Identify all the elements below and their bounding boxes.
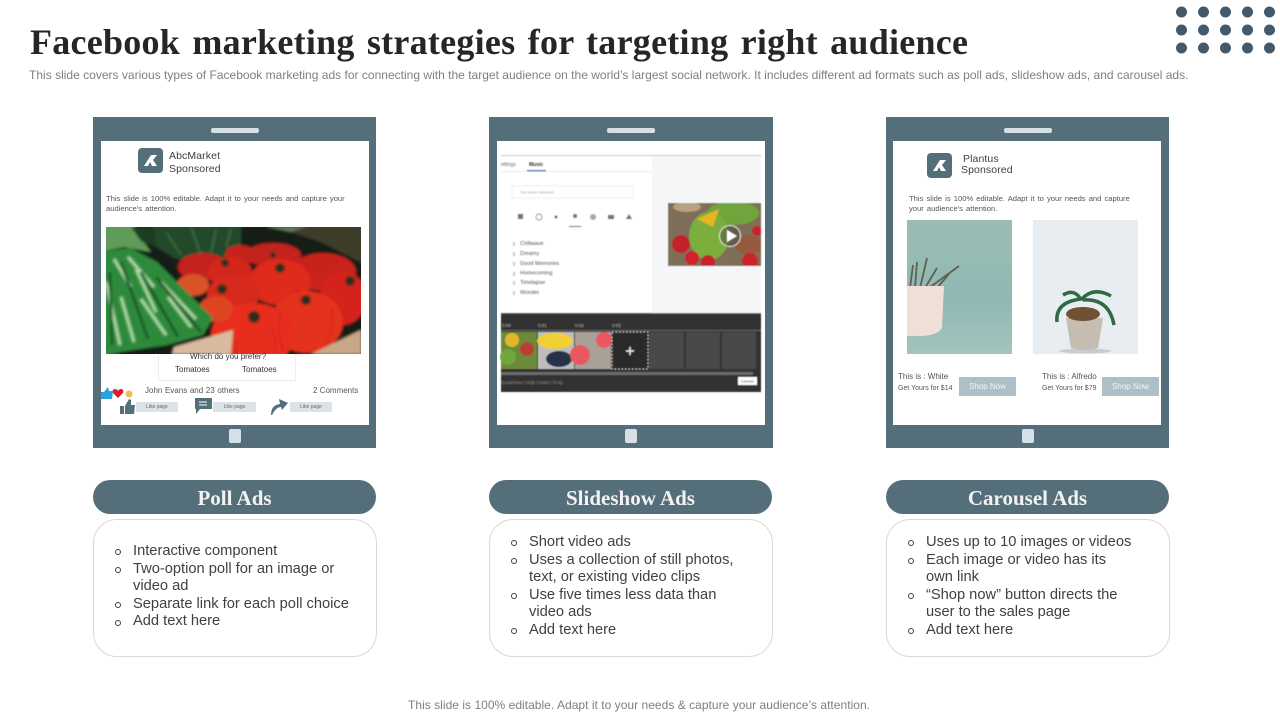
screenshot: slideshow video editor: Chillwave — [520, 241, 544, 247]
comment count: 2 Comments — [313, 386, 358, 395]
screenshot: slideshow video editor: Guidelines | Help Center | FAQ — [501, 380, 563, 385]
icon: brand logo — [927, 153, 952, 178]
icon: reactions — [101, 387, 132, 399]
bullet list — [908, 534, 1131, 638]
screenshot: slideshow video editor: Homecoming — [520, 270, 552, 276]
decorative dot grid — [1176, 6, 1275, 54]
preview image — [668, 201, 763, 269]
heading: carousel ads: Carousel Ads — [968, 486, 1087, 510]
panel: poll ads tablet mockup — [93, 117, 376, 448]
poll option one: Tomatoes — [175, 365, 210, 374]
product one price: Get Yours for $14 — [898, 385, 952, 392]
bullet list: Separate link for each poll choice — [133, 596, 349, 612]
screenshot: slideshow video editor: 0:03 — [612, 323, 621, 328]
bullet list — [115, 543, 349, 629]
footer note: This slide is 100% editable. Adapt it to your needs & capture your audience’s attention. — [408, 698, 870, 712]
heading: slideshow ads: Slideshow Ads — [566, 486, 695, 510]
bullet list: user to the sales page — [926, 604, 1070, 620]
screenshot: slideshow video editor: ettings — [501, 162, 516, 168]
reaction names: John Evans and 23 others — [145, 386, 240, 395]
bullet list: Two-option poll for an image or — [133, 561, 334, 577]
product one name: This is : White — [898, 372, 948, 381]
screenshot: slideshow video editor: Wonder — [520, 290, 539, 296]
product one button — [959, 377, 1016, 396]
ad copy: This slide is 100% editable. Adapt it to your needs and capture your — [106, 194, 345, 203]
screenshot: slideshow video editor: Music — [529, 162, 543, 168]
screenshot: slideshow video editor: 0:02 — [575, 323, 584, 328]
ad copy: your audience's attention. — [909, 204, 997, 212]
poll option two: Tomatoes — [242, 365, 277, 374]
heading: slideshow ads — [489, 480, 772, 514]
screenshot: slideshow video editor: 0:01 — [538, 323, 547, 328]
bullet list: video ad — [133, 578, 188, 594]
panel: carousel ads features — [886, 519, 1170, 657]
heading: poll ads: Poll Ads — [197, 486, 272, 510]
bullet list: own link — [926, 569, 979, 585]
screenshot: slideshow video editor: Cancel — [741, 378, 754, 384]
bullet list: Short video ads — [529, 534, 631, 550]
product two button: Shop Now — [1112, 382, 1149, 391]
photo: tomatoes — [106, 227, 361, 354]
bullet list: Each image or video has its — [926, 552, 1106, 568]
panel: slideshow ads tablet mockup — [489, 117, 773, 448]
ad copy: This slide is 100% editable. Adapt it to your needs and capture — [909, 194, 1130, 203]
product one button: Shop Now — [969, 382, 1006, 391]
ad copy — [106, 194, 345, 212]
heading: poll ads — [93, 480, 376, 514]
screenshot: slideshow video editor — [499, 154, 762, 393]
screenshot: slideshow video editor: Dreamy — [520, 251, 540, 257]
bullet list: Use five times less data than — [529, 587, 716, 603]
bullet list: “Shop now” button directs the — [926, 587, 1117, 603]
like button one — [136, 402, 178, 412]
ad copy: audience's attention. — [106, 204, 176, 212]
advertiser name: Sponsored — [961, 164, 1013, 176]
like button three — [290, 402, 332, 412]
screenshot: slideshow video editor: 0:00 — [502, 323, 511, 328]
photo: plant in cream pot — [907, 220, 1012, 354]
advertiser name: Plantus — [963, 153, 999, 165]
bullet list: video ads — [529, 604, 592, 620]
product two name: This is : Alfredo — [1042, 372, 1097, 381]
panel: slideshow ads features — [489, 519, 773, 657]
screenshot: slideshow video editor: Good Memories — [520, 261, 559, 267]
subtitle: This slide covers various types of Facebook marketing ads for connecting with the target audience on the world’s largest social network. It includes different ad formats such as poll ads, slideshow ads, and carousel ads. — [29, 68, 1188, 82]
bullet list: Add text here — [926, 622, 1013, 638]
poll card — [158, 354, 296, 381]
like button two: Like page — [224, 404, 245, 410]
bullet list: Uses a collection of still photos, — [529, 552, 733, 568]
heading: carousel ads — [886, 480, 1169, 514]
bullet list: Add text here — [133, 613, 220, 629]
icon: share — [271, 399, 288, 415]
photo: plant in stone pot — [1033, 220, 1138, 354]
advertiser name — [961, 153, 1013, 176]
product two price: Get Yours for $79 — [1042, 385, 1096, 392]
bullet list: Uses up to 10 images or videos — [926, 534, 1131, 550]
bullet list: Add text here — [529, 622, 616, 638]
bullet list: text, or existing video clips — [529, 569, 700, 585]
icon: like — [120, 399, 135, 414]
advertiser name — [169, 150, 221, 174]
panel: carousel ads tablet mockup — [886, 117, 1169, 448]
icon: comment — [195, 398, 212, 414]
like button three: Like page — [300, 404, 322, 410]
screenshot: slideshow video editor: No music selected — [521, 190, 554, 194]
product two button — [1102, 377, 1159, 396]
advertiser name: AbcMarket — [169, 150, 220, 162]
icon: brand logo — [138, 148, 163, 173]
screenshot: slideshow video editor: Timelapse — [520, 280, 545, 286]
bullet list: Interactive component — [133, 543, 277, 559]
panel: poll ads features — [93, 519, 377, 657]
title: Facebook marketing strategies for targeting right audience — [30, 22, 968, 62]
bullet list — [511, 534, 733, 638]
like button one: Like page — [146, 404, 168, 410]
like button two — [213, 402, 256, 412]
advertiser name: Sponsored — [169, 162, 221, 174]
timeline — [501, 314, 761, 392]
ad copy — [909, 194, 1130, 212]
poll question: Which do you prefer? — [190, 352, 266, 361]
